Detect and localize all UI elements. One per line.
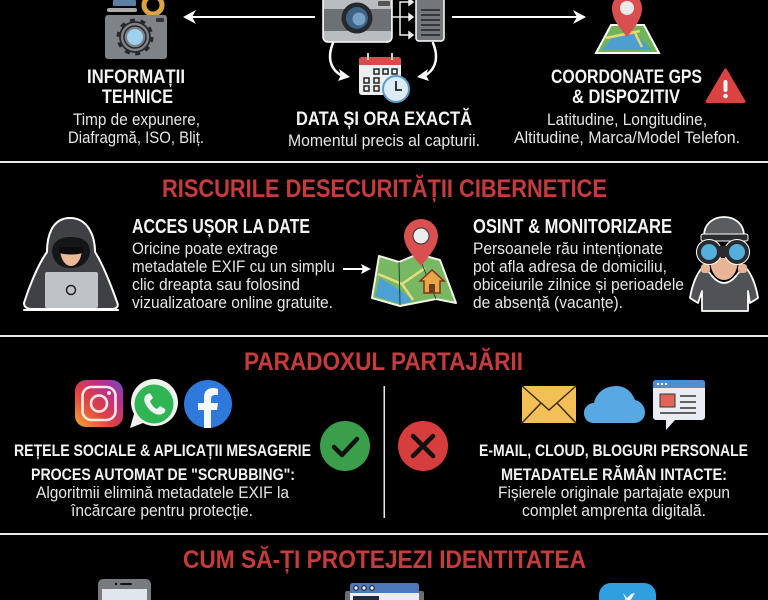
arrow: document to calendar	[417, 43, 436, 81]
arrow: camera to calendar	[330, 43, 350, 81]
text: metadata stays intact: complet amprenta digitală.	[522, 502, 706, 520]
text: technical details	[68, 111, 204, 147]
icon: spy with binoculars	[690, 217, 758, 311]
text: easy access description: clic dreapta sau folosind	[132, 276, 300, 294]
text: easy access description: vizualizatoare online gratuite.	[132, 294, 333, 312]
arrow: to map	[343, 264, 371, 274]
arrow: to GPS coordinates	[452, 10, 586, 24]
text: GPS details: Latitudine, Longitudine,	[547, 111, 707, 129]
heading: social networks: REȚELE SOCIALE & APLICAȚII MESAGERIE	[14, 442, 311, 460]
text: metadata stays intact	[498, 465, 730, 520]
text: easy access description: Oricine poate extrage	[132, 240, 278, 258]
heading: GPS coordinates and device	[551, 67, 702, 108]
text: automatic scrubbing: Algoritmii elimină metadatele EXIF la	[36, 484, 290, 502]
heading: GPS coordinates and device: COORDONATE GPS	[551, 67, 702, 88]
text: easy access description	[132, 240, 335, 312]
heading: how to protect identity: CUM SĂ-ȚI PROTEJEZI IDENTITATEA	[183, 545, 586, 574]
arrow: to technical information	[183, 10, 315, 24]
text: OSINT description	[473, 240, 684, 312]
heading: technical information	[87, 67, 185, 108]
heading: easy data access: ACCES UȘOR LA DATE	[132, 216, 310, 238]
icon: map with pin and house	[372, 219, 456, 306]
heading: technical information: TEHNICE	[102, 87, 173, 108]
icon: Instagram	[75, 380, 123, 427]
text: metadata stays intact: Fișierele originale partajate expun	[498, 484, 730, 502]
icon: WhatsApp	[130, 379, 178, 428]
heading: technical information: INFORMAȚII	[87, 67, 185, 88]
icon: blue app tile	[599, 583, 656, 600]
text: OSINT description: obiceiurile zilnice și perioadele	[473, 276, 684, 294]
text: GPS details: Altitudine, Marca/Model Telefon.	[514, 129, 740, 147]
icon: green check	[320, 421, 370, 471]
text: OSINT description: Persoanele rău intenționate	[473, 240, 663, 258]
icon: GPS pin on map	[596, 0, 659, 53]
text: OSINT description: pot afla adresa de domiciliu,	[473, 258, 667, 276]
text: date description: Momentul precis al capturii.	[288, 132, 480, 150]
icon: central camera	[323, 0, 392, 42]
icon: warning triangle	[707, 70, 744, 102]
icon: red cross	[398, 421, 448, 471]
text: OSINT description: de absență (vacanțe).	[473, 294, 623, 312]
heading: cybersecurity risks: RISCURILE DESECURITĂȚII CIBERNETICE	[162, 174, 607, 203]
icon: envelope	[522, 386, 576, 423]
text: metadata stays intact: METADATELE RĂMÂN INTACTE:	[501, 465, 727, 484]
heading: sharing paradox: PARADOXUL PARTAJĂRII	[244, 347, 523, 376]
icon: Facebook	[184, 380, 232, 428]
icon: browser blog window	[653, 380, 705, 430]
text: technical details: Diafragmă, ISO, Bliț.	[68, 129, 204, 147]
heading: GPS coordinates and device: & DISPOZITIV	[572, 87, 680, 108]
heading: exact date and time: DATA ȘI ORA EXACTĂ	[296, 108, 472, 130]
icon: phone	[98, 579, 151, 600]
icon: technical camera with gear	[105, 0, 167, 59]
text: GPS details	[514, 111, 740, 147]
arrows: camera to document	[392, 0, 413, 38]
text: automatic scrubbing: PROCES AUTOMAT DE "SCRUBBING":	[31, 466, 295, 484]
icon: hooded hacker with laptop	[23, 218, 119, 311]
text: technical details: Timp de expunere,	[73, 111, 200, 129]
icon: browser window	[345, 583, 424, 600]
icon: calendar with clock	[359, 53, 409, 102]
heading: OSINT and monitoring: OSINT & MONITORIZARE	[473, 216, 672, 238]
text: automatic scrubbing: încărcare pentru protecție.	[70, 502, 253, 520]
icon: document file	[416, 0, 444, 41]
icon: cloud	[584, 386, 645, 423]
text: easy access description: metadatele EXIF cu un simplu	[132, 258, 335, 276]
text: automatic scrubbing	[31, 466, 295, 520]
